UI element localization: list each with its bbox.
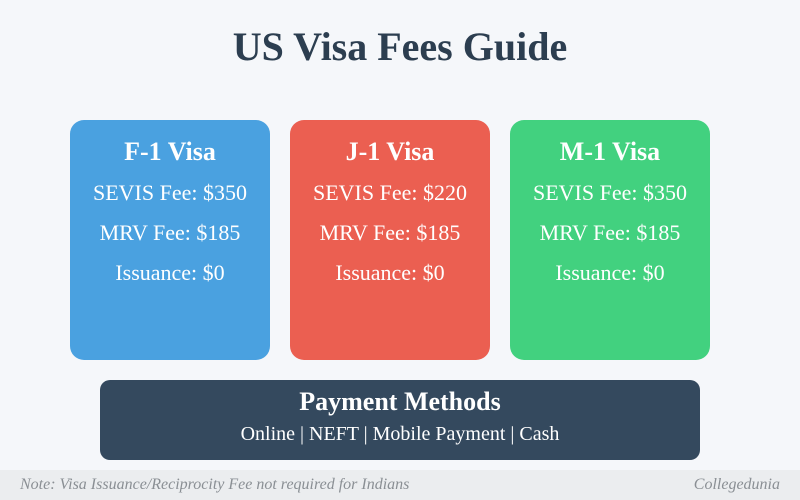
card: F-1 Visa: SEVIS Fee: $350 [93,180,247,205]
card: M-1 Visa: SEVIS Fee: $350 [533,180,687,205]
card: M-1 Visa [510,120,710,360]
card: J-1 Visa: J-1 Visa [346,137,434,166]
title: US Visa Fees Guide [233,24,567,69]
card: J-1 Visa: MRV Fee: $185 [320,220,460,245]
card: F-1 Visa [70,120,270,360]
card: M-1 Visa: M-1 Visa [560,137,660,166]
panel: payment methods: Online | NEFT | Mobile Payment | Cash [241,423,559,445]
card: J-1 Visa [290,120,490,360]
footer: Note: Visa Issuance/Reciprocity Fee not required for Indians [20,476,409,493]
card: M-1 Visa: Issuance: $0 [555,260,665,285]
card: F-1 Visa: Issuance: $0 [115,260,225,285]
panel: payment methods: Payment Methods [299,387,501,416]
card: F-1 Visa: F-1 Visa [124,137,216,166]
panel: payment methods [100,380,700,460]
card: F-1 Visa: MRV Fee: $185 [100,220,240,245]
footer [0,470,800,500]
card: J-1 Visa: Issuance: $0 [335,260,445,285]
card: J-1 Visa: SEVIS Fee: $220 [313,180,467,205]
card: M-1 Visa: MRV Fee: $185 [540,220,680,245]
footer: Collegedunia [694,476,780,493]
